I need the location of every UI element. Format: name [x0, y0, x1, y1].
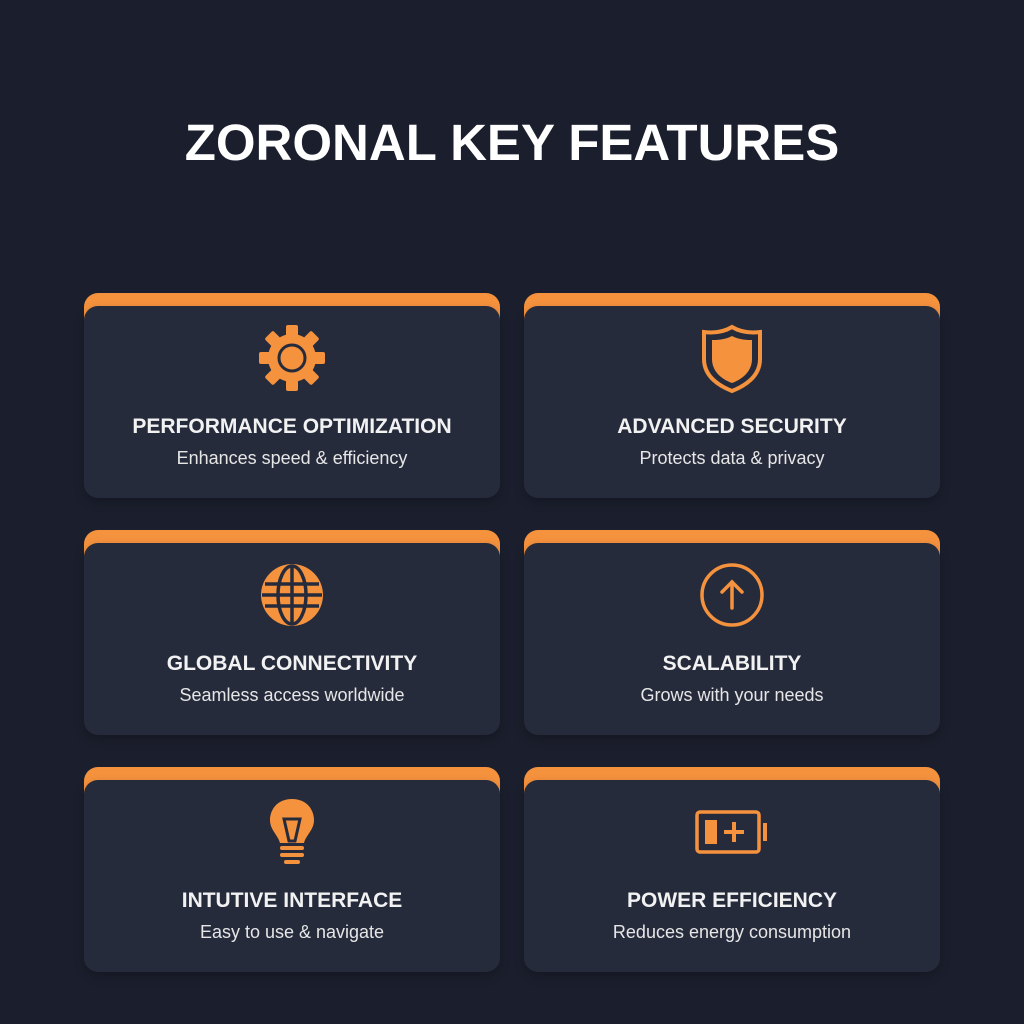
icon: battery: [695, 810, 767, 854]
icon: gear: [259, 325, 325, 391]
heading: GLOBAL CONNECTIVITY: [167, 652, 417, 675]
icon: globe: [261, 564, 323, 626]
title: ZORONAL KEY FEATURES: [185, 114, 839, 171]
panel: power efficiency: [524, 767, 940, 973]
heading: PERFORMANCE OPTIMIZATION: [132, 415, 452, 438]
panel: performance optimization: [84, 293, 500, 499]
icon: up arrow circle: [700, 563, 764, 627]
heading: INTUTIVE INTERFACE: [182, 889, 402, 912]
text: Easy to use & navigate: [200, 922, 384, 942]
text: Grows with your needs: [640, 685, 824, 705]
heading: ADVANCED SECURITY: [617, 415, 847, 438]
panel: intuitive interface: [84, 767, 500, 973]
text: Protects data & privacy: [639, 448, 825, 468]
icon: light bulb: [270, 799, 314, 864]
panel: global connectivity: [84, 530, 500, 736]
panel: advanced security: [524, 293, 940, 499]
heading: SCALABILITY: [663, 652, 801, 675]
icon: shield: [702, 324, 762, 393]
panel: scalability: [524, 530, 940, 736]
text: Reduces energy consumption: [613, 922, 851, 942]
heading: POWER EFFICIENCY: [627, 889, 837, 912]
text: Seamless access worldwide: [179, 685, 405, 705]
text: Enhances speed & efficiency: [177, 448, 407, 468]
